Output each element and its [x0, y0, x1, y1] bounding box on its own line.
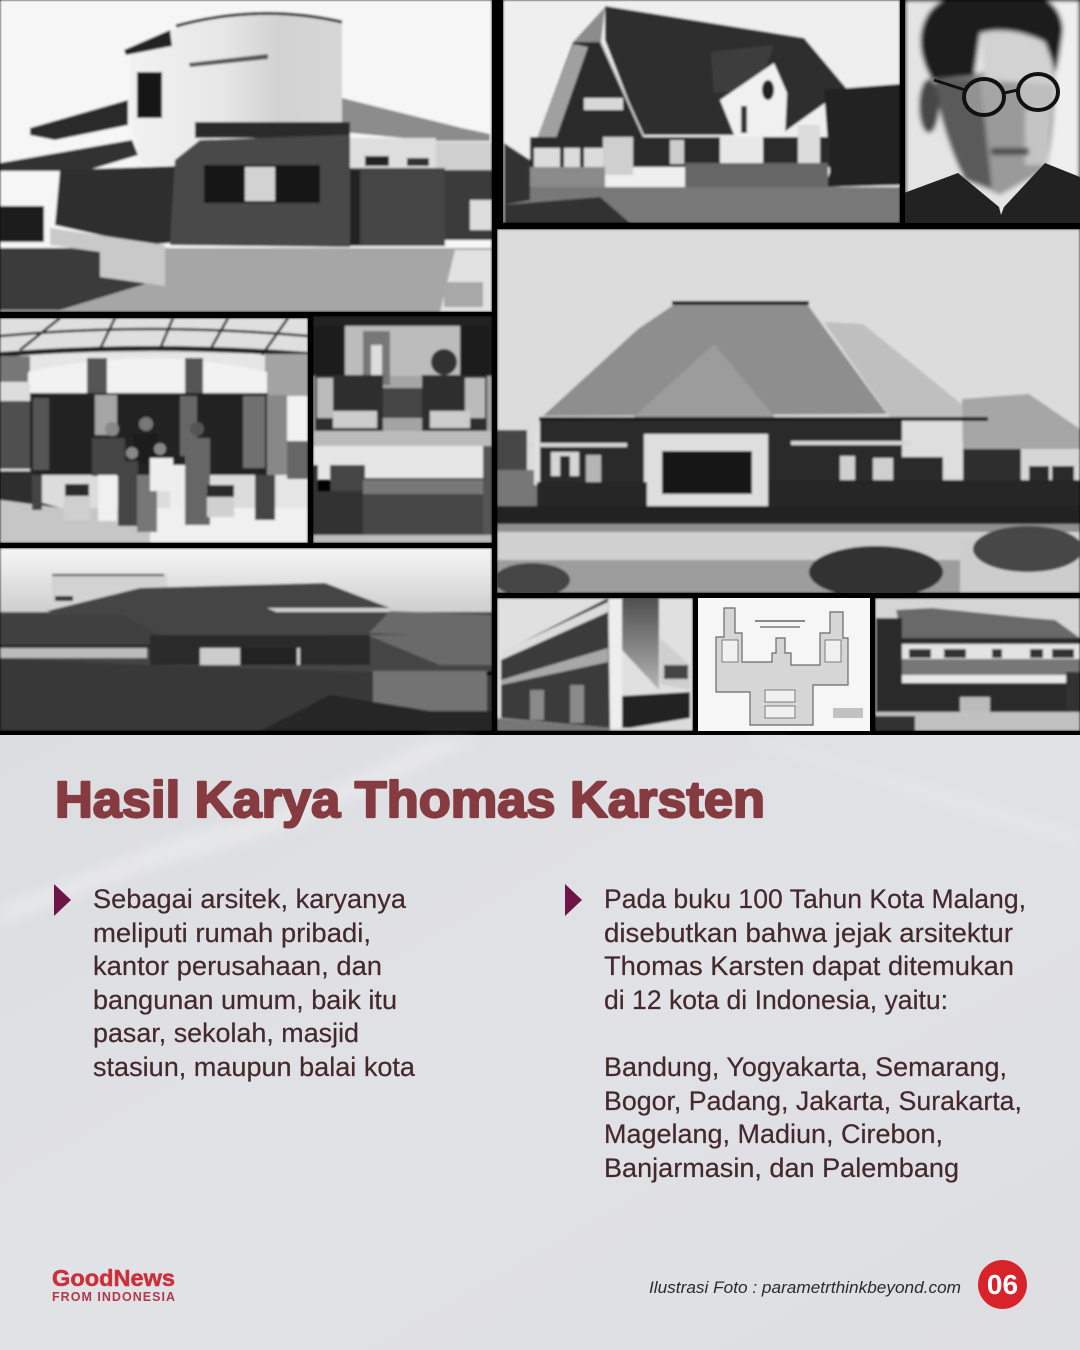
right body text: Bogor, Padang, Jakarta, Surakarta, — [604, 1086, 1022, 1116]
photo: large roofed house — [494, 229, 1080, 598]
left body text: stasiun, maupun balai kota — [93, 1052, 416, 1082]
photo credit: Ilustrasi Foto : parametrthinkbeyond.com — [649, 1278, 961, 1297]
photo: floor plan — [698, 598, 870, 731]
logo: GoodNews from Indonesia: FROM INDONESIA — [52, 1290, 175, 1304]
photo: furnished rooms — [313, 316, 492, 543]
left body text: Sebagai arsitek, karyanya — [93, 884, 407, 914]
left body text: kantor perusahaan, dan — [93, 951, 382, 981]
photo: traditional-roof building — [875, 598, 1080, 731]
left body text — [93, 884, 416, 1082]
right body text: di 12 kota di Indonesia, yaitu: — [604, 985, 948, 1015]
right body text — [604, 884, 1026, 1183]
right body text: Magelang, Madiun, Cirebon, — [604, 1119, 943, 1149]
logo: GoodNews from Indonesia — [52, 1265, 175, 1304]
right body text: Bandung, Yogyakarta, Semarang, — [604, 1052, 1007, 1082]
icon: right bullet arrow — [565, 884, 582, 916]
right body text: disebutkan bahwa jejak arsitektur — [604, 918, 1013, 948]
right body text: Thomas Karsten dapat ditemukan — [604, 951, 1014, 981]
photo: portrait of Thomas Karsten — [904, 0, 1080, 223]
collage background — [0, 0, 1080, 735]
photo: family in round interior — [0, 318, 308, 543]
left body text: meliputi rumah pribadi, — [93, 918, 371, 948]
photo: house on a hill — [0, 548, 492, 731]
icon: left bullet arrow — [54, 884, 71, 916]
page number badge: 06 — [987, 1269, 1018, 1300]
logo: GoodNews from Indonesia: GoodNews — [52, 1265, 175, 1291]
paper creases — [0, 740, 1080, 925]
paper background panel — [0, 735, 1080, 1350]
photo: steep roof house — [503, 0, 900, 223]
left body text: bangunan umum, baik itu — [93, 985, 397, 1015]
right body text: Pada buku 100 Tahun Kota Malang, — [604, 884, 1026, 914]
photo: two-storey building — [497, 597, 693, 731]
right bullet block — [565, 884, 1026, 1183]
left bullet block — [54, 884, 416, 1082]
left body text: pasar, sekolah, masjid — [93, 1018, 359, 1048]
right body text: Banjarmasin, dan Palembang — [604, 1153, 959, 1183]
title: Hasil Karya Thomas Karsten — [55, 771, 765, 828]
photo: curved modernist house — [0, 0, 492, 312]
page number badge — [978, 1260, 1027, 1309]
